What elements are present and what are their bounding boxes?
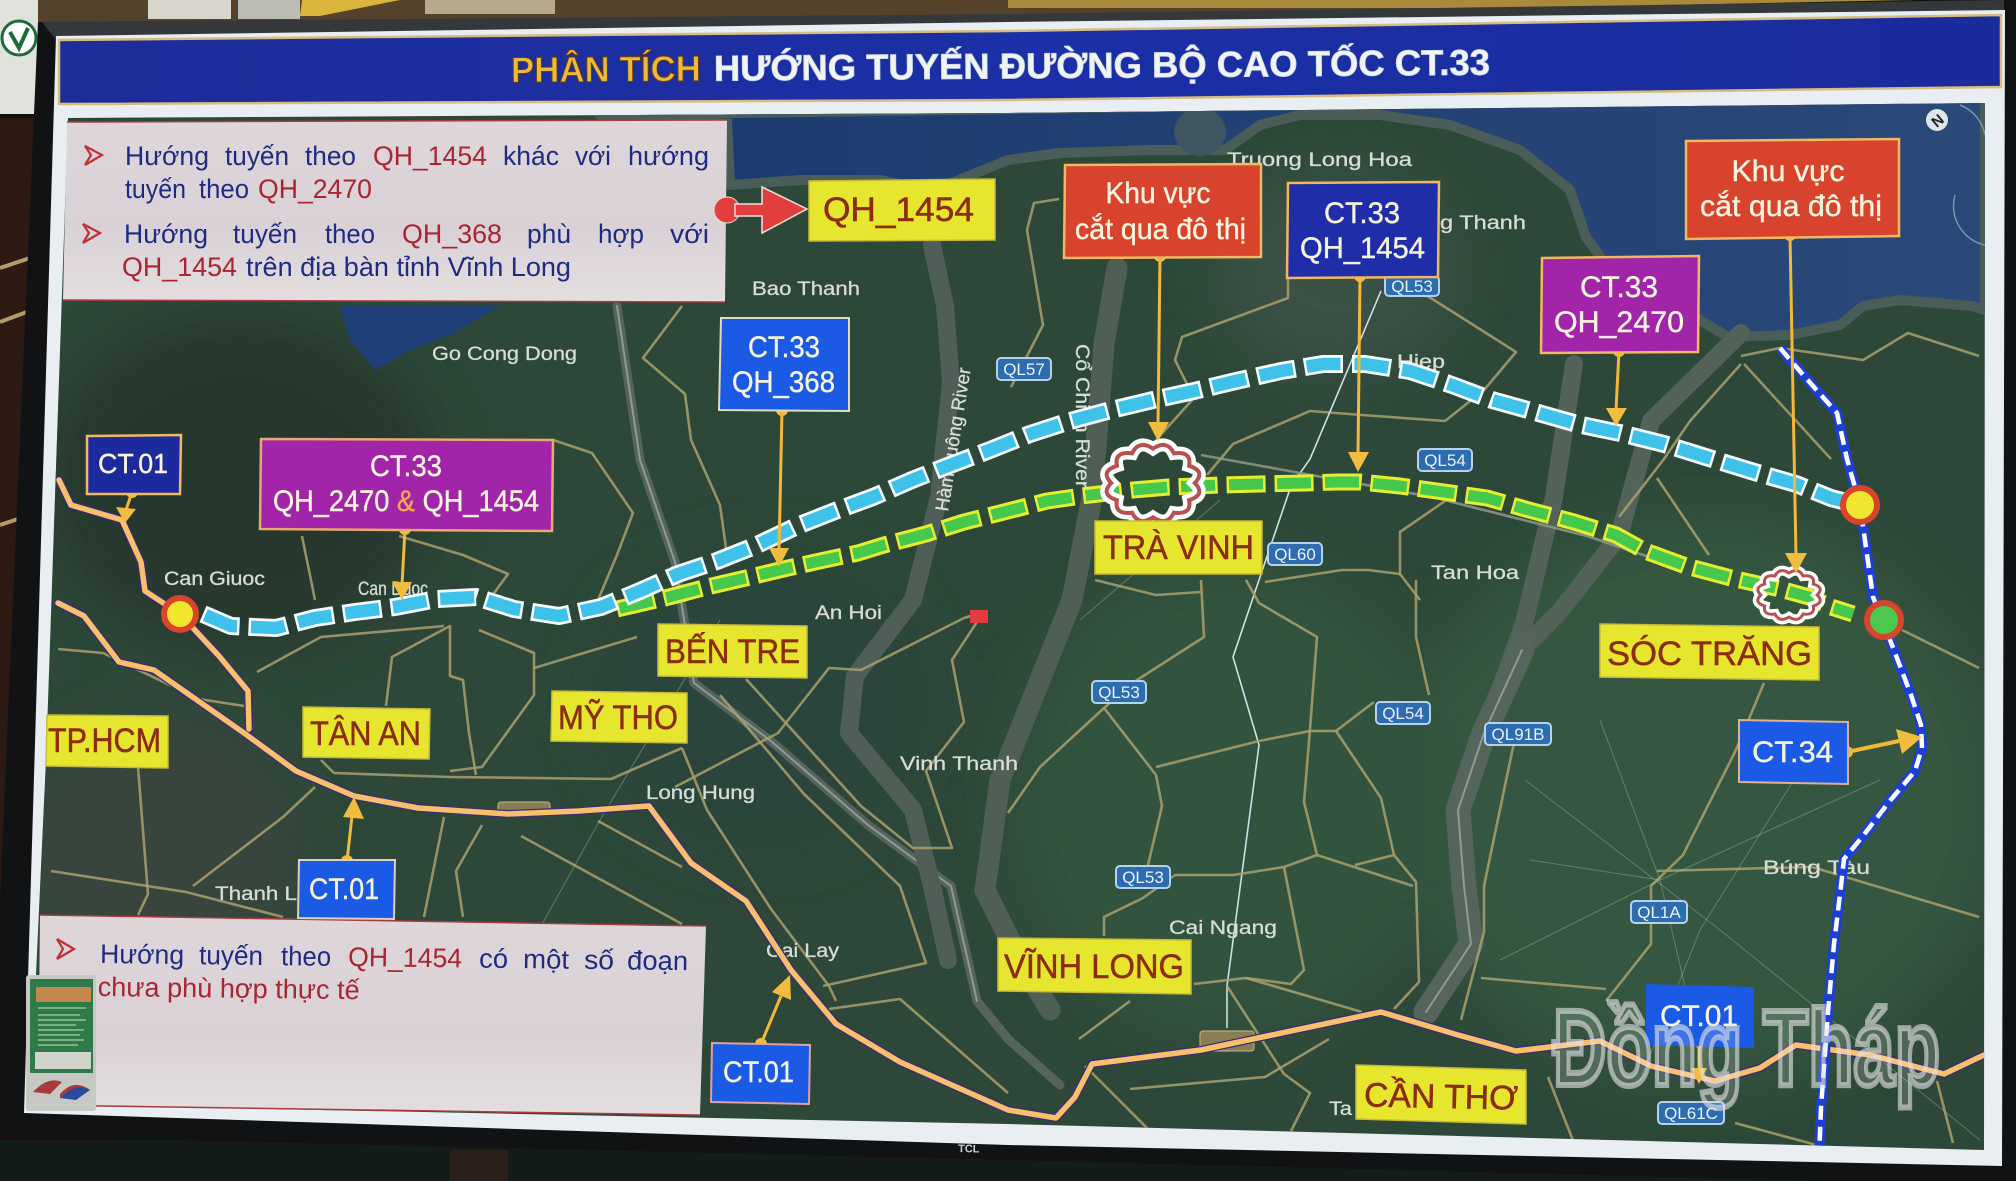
place names: An Hoi: [815, 603, 882, 624]
label: CẦN THƠ: CẦN THƠ: [1364, 1076, 1518, 1118]
land shading: [20, 170, 2000, 1080]
place names: Ta: [1329, 1099, 1352, 1120]
label: TRÀ VINH: TRÀ VINH: [1103, 529, 1254, 567]
text: third note: có: [479, 944, 508, 974]
connector: CT.33 QH_368: [769, 404, 789, 567]
text: second note: trên địa bàn tỉnh Vĩnh Long: [246, 252, 571, 282]
highway shields: QL53: [1098, 683, 1140, 702]
text: second note: theo: [325, 219, 375, 249]
place names: Cai Ngang: [1169, 918, 1277, 939]
label: CT.01 bottom right: CT.01: [1660, 1000, 1738, 1033]
label: TÂN AN: [303, 707, 430, 759]
label: CT.33 QH_368: CT.33: [748, 331, 820, 364]
rivers: [617, 245, 1741, 1085]
text: second note: với: [670, 219, 709, 249]
label: TRÀ VINH: [1095, 521, 1262, 574]
label: BẾN TRE: [658, 624, 807, 678]
label: CT.33 QH_368: [719, 318, 849, 411]
route CT.01: [58, 480, 1984, 1118]
text: third note: đoạn: [627, 945, 688, 976]
text: second note: tuyến: [233, 219, 297, 249]
compass: [1926, 105, 1985, 245]
text: first note: hướng: [628, 141, 709, 171]
label: CT.01 bottom right: [1646, 984, 1754, 1048]
label: Khu vực right: cắt qua đô thị: [1700, 190, 1882, 223]
label: CT.34: [1739, 720, 1848, 784]
place names: Hiep: [1397, 352, 1445, 373]
place names: Cổ Chiên River: [1071, 344, 1092, 489]
place names: Tan Hoa: [1431, 563, 1520, 584]
text: second note: [122, 219, 709, 282]
text: second note: QH_1454: [122, 252, 237, 282]
label: CT.01 centre: CT.01: [723, 1056, 794, 1089]
text: second note: phù: [527, 219, 571, 249]
logo sign top left: [0, 0, 38, 114]
text: second note: Hướng: [124, 219, 208, 249]
text: first note: Hướng: [125, 141, 209, 171]
sea: [600, 95, 1985, 337]
text: first note: với: [575, 141, 611, 171]
place names: Vinh Thanh: [900, 754, 1018, 775]
text: first note: theo: [199, 174, 249, 204]
place names: g Thanh: [1440, 213, 1526, 234]
junction markers: [164, 488, 1901, 637]
label: CT.33 QH_1454: [1287, 182, 1439, 278]
label: CT.33 QH_368: QH_368: [732, 366, 835, 399]
label: QH_1454: [809, 179, 995, 241]
label: TÂN AN: TÂN AN: [310, 715, 421, 753]
green rating sticker: [26, 975, 96, 1111]
title text: HƯỚNG TUYẾN ĐƯỜNG BỘ CAO TỐC CT.33: [714, 41, 1490, 89]
label: SÓC TRĂNG: [1600, 624, 1819, 680]
highway shields: QL91B: [1492, 725, 1544, 744]
label: CT.33 QH_1454: CT.33: [1324, 197, 1400, 230]
text: third note: Hướng: [100, 939, 184, 970]
route CT.33 QH_1454 green dashed: [617, 482, 1853, 614]
panel: route analysis notes top: [63, 120, 727, 302]
icon: bullet arrow 1: [85, 146, 102, 165]
connector: purple CT.33 box: [392, 523, 412, 600]
place names: Can Duoc: [358, 579, 428, 600]
panel: note bottom: [38, 915, 706, 1115]
label: CT.33 QH_2470: CT.33: [1580, 271, 1658, 304]
label: Khu vực left: [1064, 164, 1261, 258]
connector: CT.01 centre-left: [341, 797, 364, 867]
highway shields: QL57: [1003, 360, 1045, 379]
place names: Cai Lay: [766, 941, 840, 962]
label: CT.33 QH_1454: QH_1454: [1300, 232, 1425, 265]
label: Khu vực left: cắt qua đô thị: [1075, 213, 1246, 246]
label: TP.HCM: TP.HCM: [48, 722, 161, 760]
place names: Hàm Luông River: [932, 366, 976, 513]
label: CT.01 dark: [87, 435, 181, 494]
label: CẦN THƠ: [1356, 1065, 1526, 1124]
connector: CT.01 top left: [116, 486, 138, 523]
label: QH_1454: QH_1454: [823, 191, 974, 229]
text: first note: theo: [305, 141, 356, 171]
label: CT.01 centre: [711, 1043, 810, 1104]
title bar: [59, 15, 2001, 104]
label: Khu vực right: [1686, 139, 1899, 239]
label: TP.HCM: [46, 715, 168, 768]
connector: CT.01 centre: [755, 975, 791, 1050]
connector: urban area left: [1148, 250, 1169, 441]
label: Khu vực left: Khu vực: [1106, 177, 1210, 210]
highway shields: QL54: [1424, 451, 1466, 470]
icon: bullet arrow 2: [83, 224, 100, 243]
text: first note: [125, 141, 709, 204]
place names: Búng Tàu: [1763, 858, 1870, 879]
connector: CT.01 bottom right: [1691, 1038, 1707, 1084]
text: third note: theo: [281, 941, 331, 972]
place names: Thanh L: [215, 884, 297, 905]
label: CT.34: CT.34: [1752, 736, 1833, 769]
connector: urban area right: [1784, 229, 1807, 573]
text: third note: số: [584, 945, 614, 975]
text: first note: tuyến: [125, 174, 186, 204]
label: CT.33 QH_2470 & QH_1454: [260, 439, 553, 531]
text: second note: hợp: [598, 219, 644, 249]
text: third note: QH_1454: [348, 942, 462, 973]
text: second note: QH_368: [402, 219, 502, 249]
label: CT.33 QH_2470 & QH_1454: CT.33: [370, 450, 442, 483]
arrow: red pointer to QH_1454: [714, 187, 807, 233]
place names: Can Giuoc: [164, 569, 265, 590]
road network: [51, 199, 1980, 1154]
text: first note: QH_1454: [373, 141, 487, 171]
monitor brand: TCL: [958, 1143, 980, 1156]
text: third note: [98, 939, 688, 1009]
connector: CT.33 QH_1454: [1348, 270, 1369, 472]
highway shields: QL60: [1274, 545, 1316, 564]
label: VĨNH LONG: [998, 938, 1191, 994]
text: third note: chưa phù hợp thực tế: [98, 972, 360, 1005]
place names: Bao Thanh: [752, 279, 860, 300]
label: MỸ THO: [551, 691, 687, 743]
label: CT.01 dark: CT.01: [98, 448, 168, 479]
highway shields: QL53: [1391, 277, 1433, 296]
label: CT.33 QH_2470: QH_2470: [1554, 306, 1684, 339]
label: CT.33 QH_2470: [1541, 256, 1699, 353]
text: first note: QH_2470: [258, 174, 372, 204]
connector: CT.33 QH_2470: [1606, 345, 1627, 426]
place names: [164, 150, 1870, 1120]
label: MỸ THO: MỸ THO: [558, 699, 678, 737]
highway shields: QL53: [1122, 868, 1164, 887]
label: VĨNH LONG: VĨNH LONG: [1004, 948, 1184, 986]
highway shields: QL1A: [1637, 903, 1681, 922]
urban area cloud 2: [1758, 571, 1820, 619]
label: SÓC TRĂNG: SÓC TRĂNG: [1607, 635, 1812, 673]
text: first note: tuyến: [225, 141, 289, 171]
highway shields: QL61C: [1664, 1104, 1718, 1123]
label: CT.01 centre-left: [298, 860, 395, 919]
place names: Long Hung: [646, 783, 755, 804]
title text: PHÂN TÍCH: [511, 47, 701, 90]
text: first note: khác: [503, 141, 559, 171]
highway shields: [498, 276, 1724, 1124]
label: Khu vực right: Khu vực: [1732, 155, 1844, 188]
route CT.34: [1780, 348, 1922, 1158]
connector: CT.34: [1841, 729, 1922, 758]
icon: bullet arrow 3: [57, 939, 74, 959]
label: CT.33 QH_2470 & QH_1454: QH_2470 & QH_1454: [273, 485, 539, 518]
label: CT.01 centre-left: CT.01: [309, 873, 379, 906]
place names: Go Cong Dong: [432, 344, 577, 365]
route CT.33 QH_2470 blue dashed: [203, 364, 1850, 628]
highway shields: QL54: [1382, 704, 1424, 723]
place names: Truong Long Hoa: [1227, 150, 1413, 171]
red marker: [970, 610, 988, 623]
urban area cloud 1: [1107, 445, 1199, 521]
label: BẾN TRE: BẾN TRE: [665, 633, 800, 671]
compass: N: [1928, 111, 1948, 131]
text: third note: tuyến: [199, 940, 263, 971]
text: third note: một: [523, 944, 570, 975]
